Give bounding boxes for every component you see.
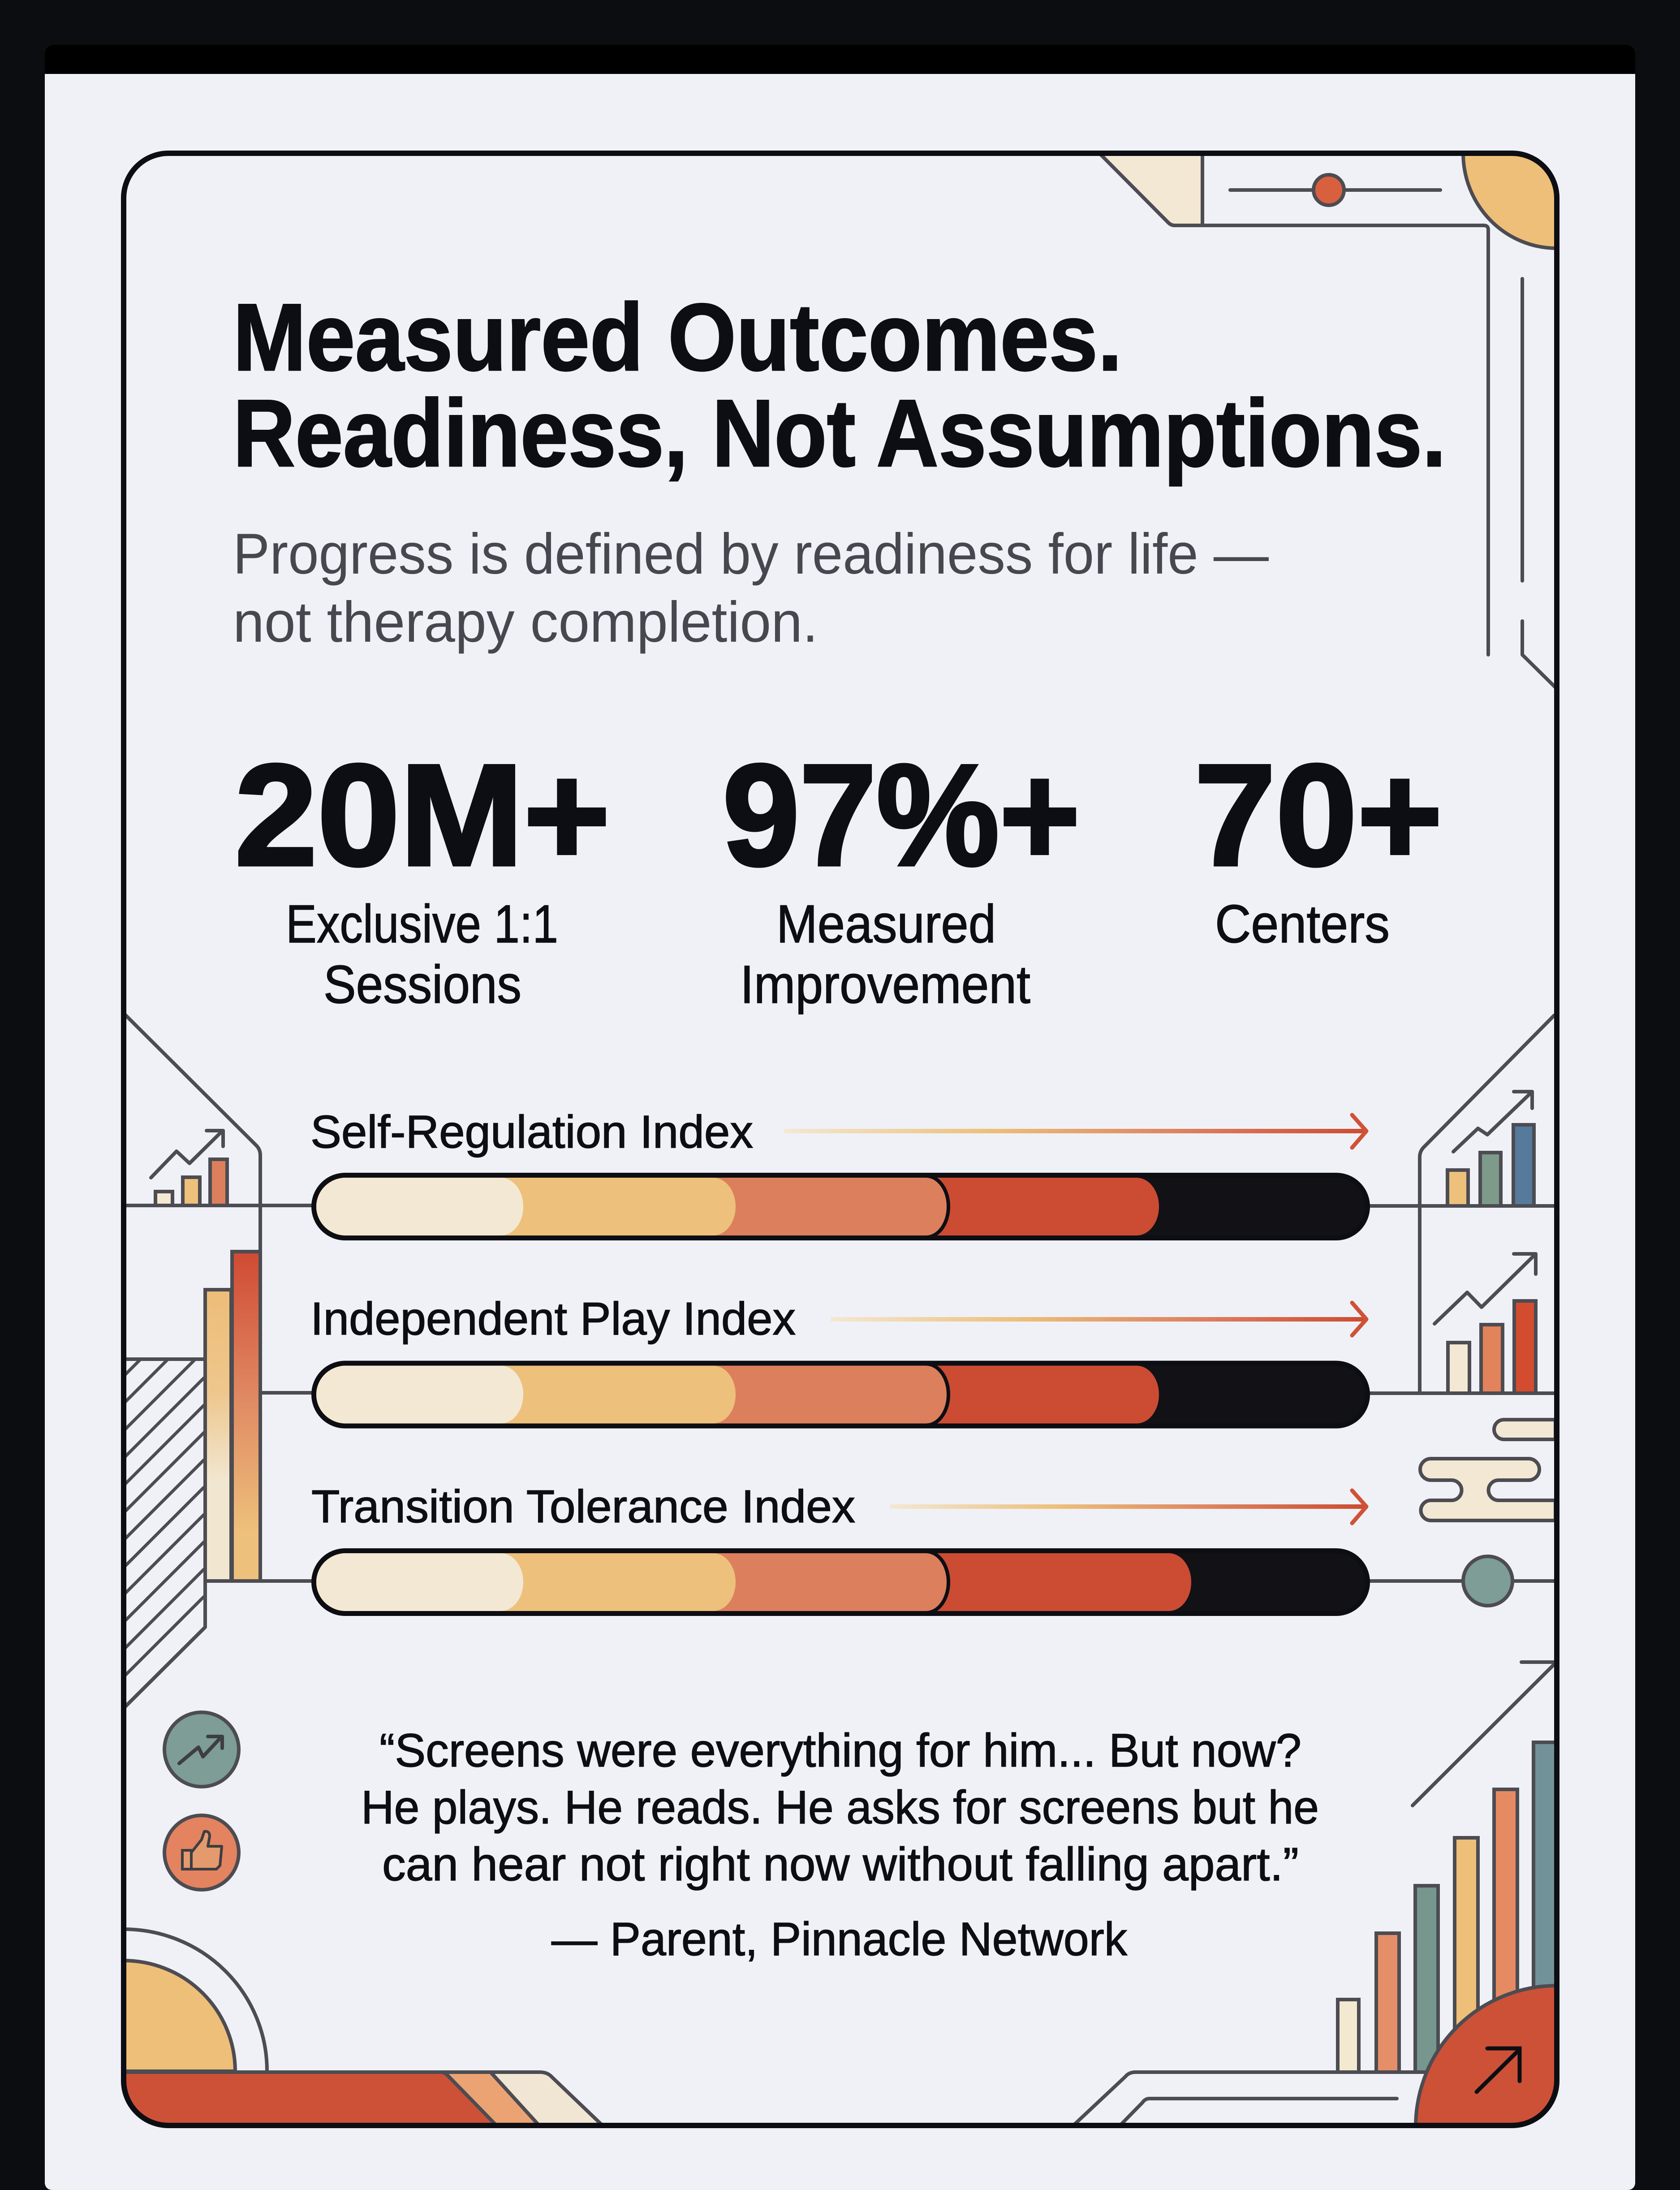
stat: sessions: 20M+ [235,735,610,896]
metric: independent play [269,1293,1367,1426]
stat: improvement: 97%+ [723,735,1080,896]
testimonial quote: — Parent, Pinnacle Network [551,1913,1127,1965]
label: Transition Tolerance Index [311,1481,855,1532]
red base band [121,2072,498,2127]
subtitle: Progress is defined by readiness for life — [233,522,1269,586]
progress bar [269,1551,1367,1613]
stat: sessions: Exclusive 1:1 [286,894,558,954]
testimonial quote [361,1724,1319,1965]
cream angled tab [1101,155,1202,225]
left side decoration [125,1015,311,1706]
stat: sessions: Sessions [323,955,521,1015]
title [233,284,1446,487]
small bar chart icon [151,1131,227,1205]
connector lines [1370,1015,1555,1581]
cream pill [1494,1420,1555,1439]
progress arrow [890,1490,1366,1523]
icon: trend circle [164,1712,239,1787]
title: Measured Outcomes. [233,284,1122,391]
subtitle: not therapy completion. [233,590,818,654]
metric: transition tolerance [269,1481,1367,1613]
tall yellow bar [205,1290,231,1581]
progress arrow [831,1303,1366,1335]
yellow corner quarter [1463,153,1557,248]
stat: improvement [723,735,1080,1015]
bottom left corner decoration [121,1929,604,2127]
progress bar [269,1175,1367,1238]
bottom right lines [1075,2072,1425,2124]
long trend arrow [1413,1662,1555,1806]
yellow half circle [124,1961,235,2071]
connector lines [125,1015,311,1581]
progress arrow [784,1115,1366,1148]
metric: self-regulation [269,1106,1367,1238]
testimonial quote: can hear not right now without falling apart.” [382,1838,1299,1891]
red corner with arrow [1416,1986,1557,2127]
top black band [45,45,1635,74]
stat: improvement: Measured [776,894,996,954]
title: Readiness, Not Assumptions. [233,380,1446,487]
testimonial quote: “Screens were everything for him... But now? [379,1724,1301,1777]
hatched block [126,1357,207,1708]
cream wedge [491,2072,604,2127]
stat: centers: Centers [1215,894,1390,954]
stats row [235,735,1443,1015]
slider line and dot [1230,175,1440,205]
bar chart icon lower [1434,1254,1536,1393]
stat: improvement: Improvement [740,955,1030,1015]
subtitle [233,522,1269,654]
label: Self-Regulation Index [310,1106,753,1158]
orange wedge [439,2072,540,2127]
outer frame [124,153,1557,2125]
testimonial quote: He plays. He reads. He asks for screens but he [361,1781,1319,1834]
frame lines [1101,155,1488,655]
progress bar [269,1363,1367,1426]
icon: thumbs up circle [164,1815,239,1890]
stat: centers: 70+ [1194,735,1443,896]
outer arc [124,1929,267,2071]
stat: sessions [235,735,610,1015]
top right corner decoration [1101,153,1557,687]
inner right lines [1522,279,1555,687]
teal node [1463,1556,1512,1606]
bar chart icon upper [1447,1092,1534,1206]
tall red bar [232,1252,260,1581]
right side decoration [1370,1015,1555,1606]
bottom right bar chart [1338,1742,1560,2072]
label: Independent Play Index [310,1293,796,1344]
cream connector shape [1420,1459,1555,1520]
